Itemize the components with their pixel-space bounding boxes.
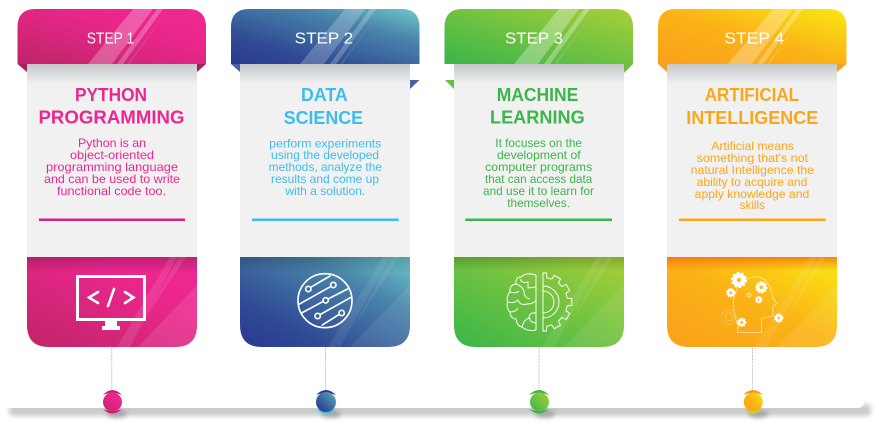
step label: STEP 2 xyxy=(295,30,353,48)
heading: SCIENCE xyxy=(284,107,363,128)
description: computer programs xyxy=(485,161,593,174)
timeline bar xyxy=(3,395,871,416)
lower block xyxy=(454,257,624,347)
header light stripes xyxy=(514,9,594,64)
heading: DATA xyxy=(301,84,348,105)
header band xyxy=(444,9,633,64)
description: programming language xyxy=(46,161,178,174)
divider xyxy=(465,218,612,221)
step label: STEP 4 xyxy=(724,30,785,48)
icon: head with gears xyxy=(722,273,783,333)
description: object-oriented xyxy=(70,149,154,162)
text panel xyxy=(27,64,197,257)
divider xyxy=(39,218,185,221)
timeline dot xyxy=(743,390,768,418)
lower block xyxy=(667,257,837,347)
step label: STEP 1 xyxy=(87,30,134,48)
heading: PYTHON xyxy=(75,84,147,105)
step label: STEP 3 xyxy=(505,30,563,48)
ribbon fold corners xyxy=(445,64,633,89)
heading: MACHINE xyxy=(497,84,578,105)
header band xyxy=(18,9,206,64)
header band xyxy=(658,9,846,64)
lower block xyxy=(27,257,197,347)
description: Artificial means xyxy=(711,140,794,153)
connector xyxy=(111,348,113,392)
text panel xyxy=(667,64,837,257)
description: themselves. xyxy=(507,197,570,210)
heading: INTELLIGENCE xyxy=(686,107,818,128)
connector xyxy=(324,348,326,392)
description xyxy=(269,138,382,198)
description: functional code too. xyxy=(57,185,166,198)
description: methods, analyze the xyxy=(269,161,382,174)
description xyxy=(44,137,180,198)
description: ability to acquire and xyxy=(697,176,807,189)
lower light stripes xyxy=(542,257,624,347)
heading xyxy=(490,84,585,128)
card: step 1 python programming xyxy=(18,9,206,418)
description: that can access data xyxy=(485,173,593,186)
connector xyxy=(538,348,540,392)
ribbon fold corners xyxy=(231,64,420,89)
header light stripes xyxy=(300,9,380,64)
description: skills xyxy=(740,199,765,212)
connector xyxy=(752,348,754,392)
text panel xyxy=(240,64,410,257)
lower block xyxy=(240,257,410,347)
header band xyxy=(231,9,420,64)
description: results and come up xyxy=(271,173,379,186)
card: step 4 artificial intelligence xyxy=(658,9,846,418)
description: apply knowledge and xyxy=(695,188,809,201)
heading xyxy=(686,84,818,128)
description: and use it to learn for xyxy=(483,185,594,198)
header light stripes xyxy=(88,9,167,64)
icon: brain and gear xyxy=(507,273,572,331)
description: with a solution. xyxy=(284,185,365,198)
heading: ARTIFICIAL xyxy=(705,84,799,105)
lower light stripes xyxy=(117,257,197,347)
description: development of xyxy=(497,149,582,162)
heading xyxy=(38,84,184,128)
divider xyxy=(679,218,826,221)
card: step 3 machine learning xyxy=(444,9,633,418)
text panel xyxy=(454,64,624,257)
card: step 2 data science xyxy=(231,9,420,418)
description: and can be used to write xyxy=(44,173,180,186)
timeline dot xyxy=(103,390,127,418)
ribbon fold corners xyxy=(658,64,846,72)
heading: PROGRAMMING xyxy=(38,106,184,128)
description: using the developed xyxy=(271,149,379,162)
description: Python is an xyxy=(78,137,146,150)
description: natural Intelligence the xyxy=(691,164,814,177)
heading xyxy=(284,84,363,128)
icon: circuit globe xyxy=(298,274,352,328)
description: perform experiments xyxy=(269,138,381,150)
description xyxy=(691,140,814,212)
ribbon fold corners xyxy=(18,64,206,72)
icon: code monitor xyxy=(78,276,144,330)
heading: LEARNING xyxy=(490,106,585,128)
description: something that's not xyxy=(697,152,809,165)
timeline dot xyxy=(316,390,341,418)
header light stripes xyxy=(728,9,807,64)
description xyxy=(483,137,594,210)
lower light stripes xyxy=(755,257,837,347)
lower light stripes xyxy=(328,257,410,347)
timeline dot xyxy=(529,390,555,418)
description: It focuses on the xyxy=(495,137,582,150)
divider xyxy=(252,218,399,221)
